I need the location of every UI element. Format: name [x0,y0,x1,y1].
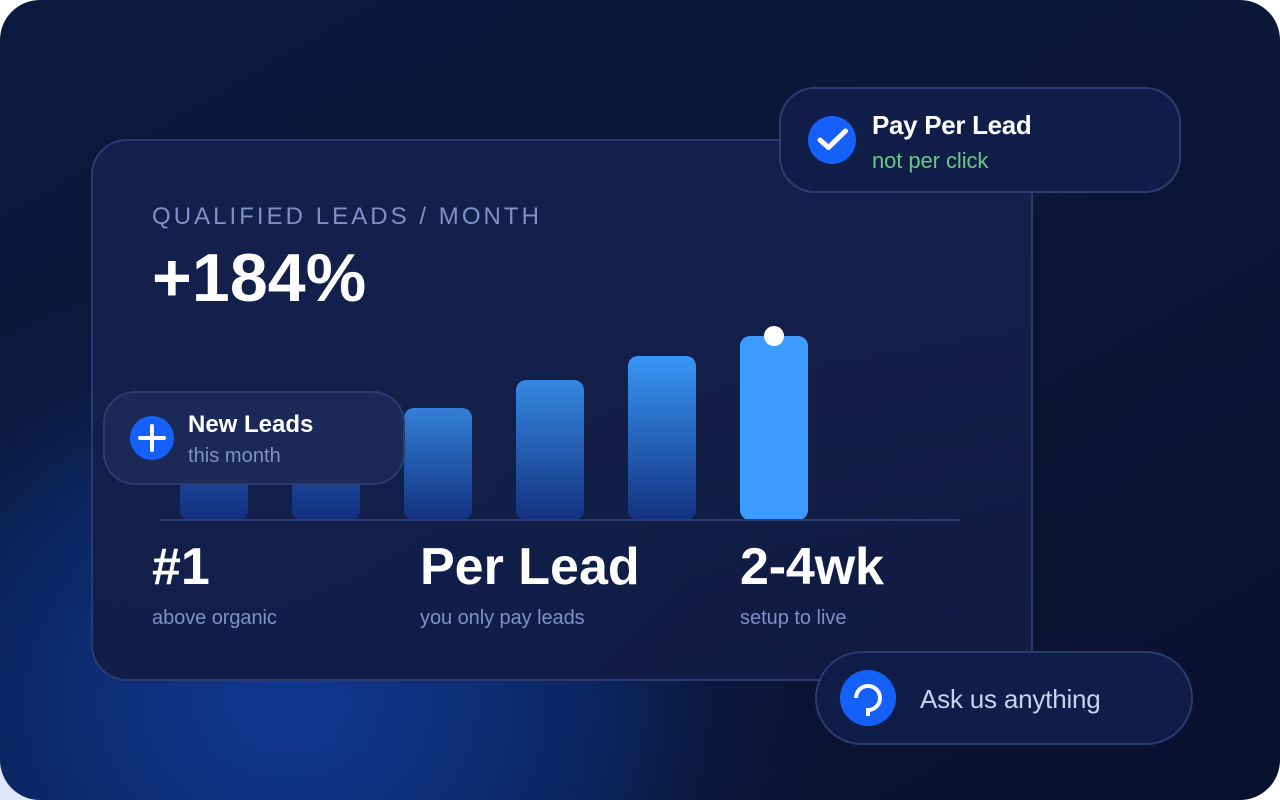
bar 4 [516,380,584,520]
bar marker dot [764,326,784,346]
icon: plus [130,416,174,460]
label: qualified leads per month: QUALIFIED LEADS / MONTH [152,203,542,230]
panel: main chart card [91,139,1033,681]
bottom-left corner tint [0,760,40,800]
stat: rank [152,538,277,629]
stat value: 2-4wk [740,538,884,596]
stat caption: setup to live [740,607,846,629]
stat value: Per Lead [420,538,640,596]
callout: pay per lead [779,87,1181,193]
stat: per lead [420,538,640,629]
callout title: New Leads [188,411,313,438]
callout subtitle: this month [188,445,281,467]
callout: new leads [103,391,405,485]
pill text: Ask us anything [920,684,1101,714]
chart baseline [160,519,960,521]
stat caption: you only pay leads [420,607,585,629]
stat: setup time [740,538,884,629]
callout: ask us anything [815,651,1193,745]
icon: question mark [840,670,896,726]
callout title: Pay Per Lead [872,110,1031,140]
callout subtitle: not per click [872,148,988,173]
bar 3 [404,408,472,520]
bar chart [160,326,960,521]
stat value: #1 [152,538,210,596]
headline number: +184% [152,240,366,316]
icon: check [808,116,856,164]
bar 1 [180,438,248,520]
bar 5 [628,356,696,520]
stat caption: above organic [152,607,277,629]
bar 2 [292,426,360,520]
bar 6 highlighted [740,336,808,520]
